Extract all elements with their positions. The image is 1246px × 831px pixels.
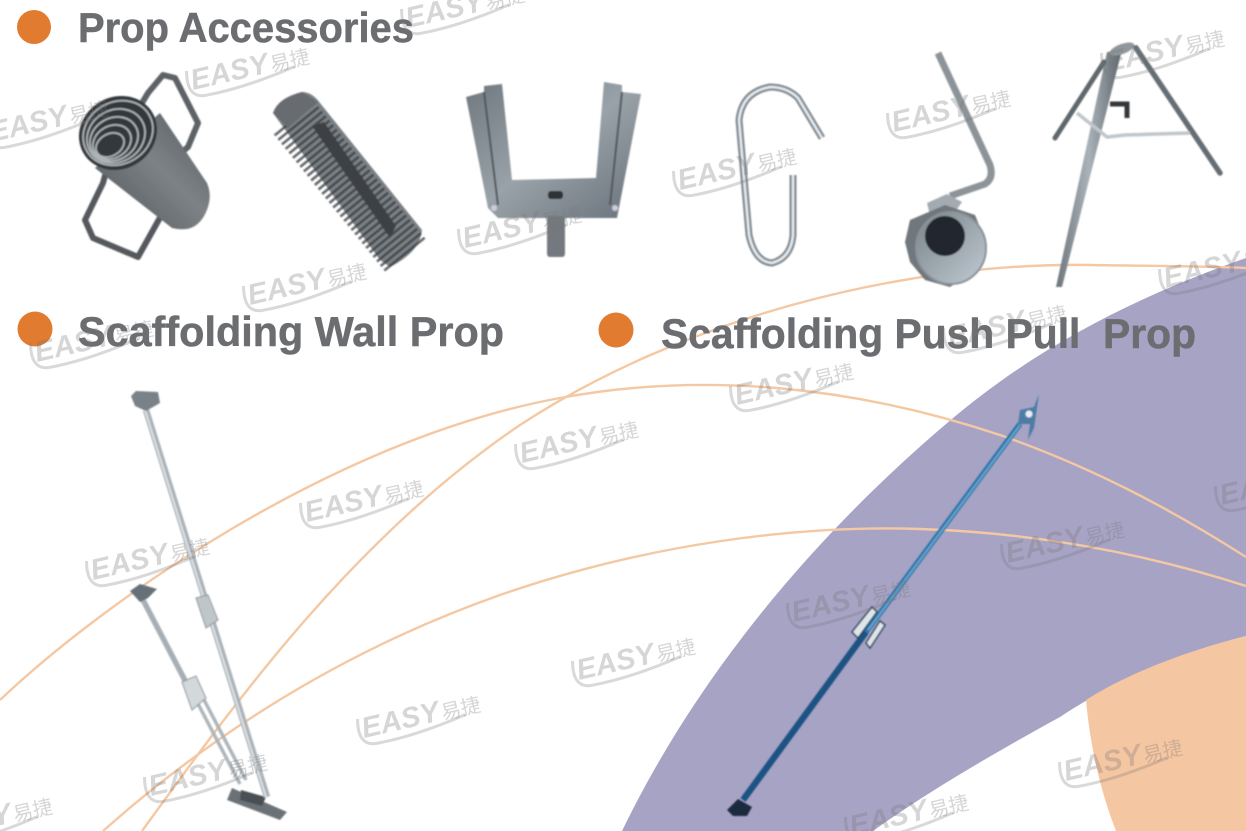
heading: Prop Accessories: Prop Accessories — [78, 4, 414, 51]
icon: coupling nut with handles — [65, 75, 210, 257]
watermarks: EASY易捷 — [944, 295, 1069, 354]
watermarks: EASY易捷 — [1102, 20, 1227, 79]
watermarks: EASY易捷 — [459, 196, 584, 255]
watermarks: EASY易捷 — [187, 38, 312, 97]
watermarks: EASY易捷 — [145, 744, 270, 803]
background: peach arc band — [1086, 636, 1246, 831]
watermarks: EASY易捷 — [731, 353, 856, 412]
icon: prop nut with handle — [905, 53, 991, 287]
watermarks: EASY易捷 — [1002, 511, 1127, 570]
heading: Scaffolding Push Pull Prop: Scaffolding Push Pull Prop — [661, 310, 1196, 357]
icon: blue push pull prop — [727, 394, 1039, 816]
watermarks: EASY易捷 — [674, 138, 799, 197]
watermarks: EASY易捷 — [1060, 729, 1185, 788]
background: purple arc band — [622, 258, 1246, 831]
watermarks: EASY易捷 — [516, 411, 641, 470]
watermarks: EASY易捷 — [358, 686, 483, 745]
watermarks: EASY易捷 — [301, 470, 426, 529]
icon: tripod — [1055, 40, 1220, 287]
watermarks: EASY易捷 — [573, 628, 698, 687]
icon: galvanized wall props — [130, 391, 287, 820]
watermarks: EASY易捷 — [244, 253, 369, 312]
heading: Scaffolding Wall Prop: Scaffolding Wall Prop — [78, 308, 504, 355]
watermarks: EASY易捷 — [87, 528, 212, 587]
watermarks: EASY易捷 — [888, 80, 1013, 139]
icon: threaded sleeve — [273, 92, 422, 267]
icon: wire hook — [739, 87, 822, 263]
icon: U-head bracket — [466, 82, 641, 257]
watermarks: EASY易捷 — [788, 570, 913, 629]
background: orange curved lines — [0, 265, 1246, 831]
watermarks: EASY易捷 — [31, 310, 156, 369]
